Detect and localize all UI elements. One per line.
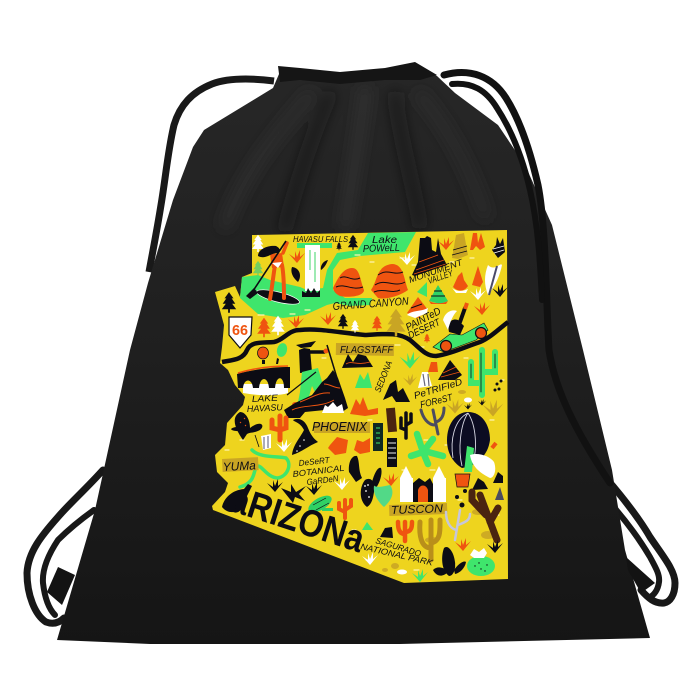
icon: orange rocks by Phoenix [328,397,378,455]
icon: green prickly cactus [411,434,443,464]
icon: brown and black cacti [386,408,411,438]
route 66 road [222,322,508,362]
label: Desert Botanical Garden: BOTANICAL [292,463,345,479]
label: Painted Desert: PAINTeD [404,305,443,334]
label: Lake Powell [363,235,400,255]
map shape [212,230,508,583]
icon: white leaves [255,434,292,452]
icon: rock and green shoot [362,522,393,538]
label: Havasu Falls: HAVASU FALLS [293,234,348,244]
green lakes and river [240,232,416,318]
painted white dashes and khaki specks [225,255,504,570]
label: Lake Havasu: LAKE [252,393,279,404]
icon: waterfall [302,245,320,297]
bag body [57,64,650,644]
drawstring bag [27,62,675,644]
label: Phoenix: PHOENIX [312,419,368,434]
icon: paddleboarder [246,241,301,307]
label: Monument Valley: VALLEY [426,268,455,286]
label: Desert Botanical Garden: GaRDeN [306,473,340,487]
icon: Phoenix skyscrapers [373,423,397,467]
icon: Flagstaff rocks [342,354,373,368]
icon: black agave plants [267,479,322,503]
fabric folds [227,100,426,220]
icon: green barrel with white flower [467,548,495,576]
rope: right shoulder double [444,73,610,483]
rope: lower right loop [606,478,675,603]
icon: green snake [240,450,289,487]
icon: striped hot air balloon [447,412,496,487]
route 66 shield: 66 [232,322,248,339]
icon: jeep with driver [433,303,488,352]
icon: orange and white cacti [334,477,351,518]
icon: black mountain [284,370,348,418]
label: Yuma: YUMa [222,458,256,474]
label: Grand Canyon: GRAND CANYON [332,296,409,313]
label: Lake Powell: POWeLL [363,243,400,255]
label: Petrified Forest: FOReST [419,392,455,411]
icon: Sedona rocks [383,380,410,402]
icon: large brown saguaro [472,492,498,540]
label: Desert Botanical Garden [292,455,345,487]
icon: London Bridge at Lake Havasu [237,366,290,395]
label: Lake Powell: Lake [372,235,398,246]
icon: mission church [400,466,446,502]
route 66 shield [229,317,252,348]
label: Lake Havasu: HAVASU [247,402,284,414]
label: Painted Desert [404,305,443,342]
Arizona map [212,230,508,583]
rope: lower left loop [27,470,103,623]
icon: orange saguaro south [398,522,412,541]
label: Tuscon: TUSCON [391,503,444,517]
label: Sedona: SEDONA [373,359,394,394]
icon: grey cactus [421,408,444,434]
side tabs [47,557,655,605]
icon: green saguaro [471,350,495,395]
label: Petrified Forest: PeTRIFIeD [413,377,464,402]
icon: dark prickly pear south [433,547,466,576]
icon: khaki saguaro [420,520,440,560]
label: Lake Havasu [247,393,284,414]
icon: black boulders east [455,472,504,508]
label: Painted Desert: DESERT [407,317,443,342]
icon: small plants north [288,237,508,328]
label: Sagurado National Park: SAGURADO [374,535,423,559]
icon: green grass and mound [355,352,462,388]
gathered neck [278,62,437,84]
icon: black prickly pear centre [349,456,382,507]
icon: Monument Valley [412,233,505,295]
label: Petrified Forest [413,377,464,411]
icon: hiker [287,341,337,408]
icon: Grand Canyon rocks [333,264,408,299]
icon: Painted Desert hills [407,282,448,318]
icon: plants and dots east [403,374,503,416]
icon: green leaf plant and orange grass [374,473,399,507]
icon: small balloons [258,342,289,364]
label: Arizona title: aRIZONa [225,479,370,561]
icon: dark prickly pear west [231,412,318,455]
label: Monument Valley: MONUMENT [407,257,465,285]
label: Desert Botanical Garden: DeSeRT [298,455,331,468]
label: Sagurado National Park [360,535,434,568]
icon: trees north west [222,235,430,343]
icon: swash of the Arizona initial [222,484,252,512]
icon: southern small plants [362,538,503,582]
icon: orange cactus [272,416,286,440]
rope: left shoulder [149,79,274,272]
icon: green barrel cactus [306,492,334,516]
label: Sagurado National Park: NATIONAL PARK [360,541,434,568]
icon: silver saguaro [446,510,470,540]
label: Flagstaff: FLAGSTAFF [340,344,394,356]
